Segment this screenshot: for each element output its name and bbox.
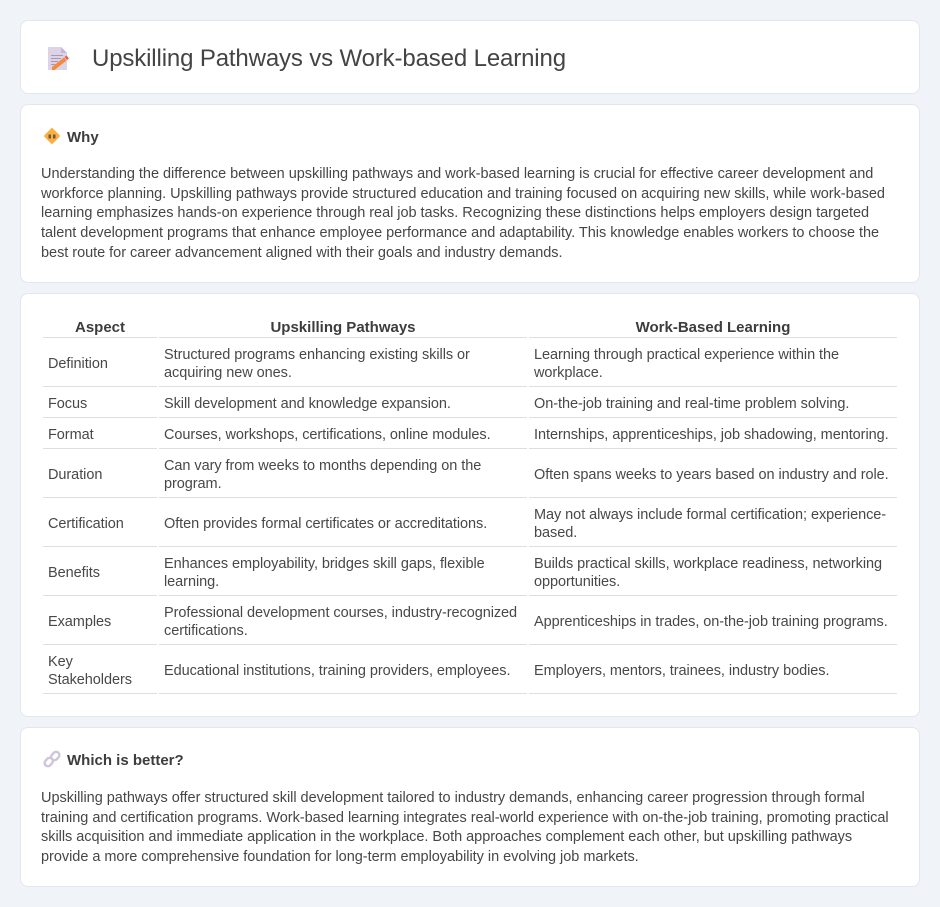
cell: examples upskilling: certifications. [164, 623, 248, 639]
cell: format upskilling: Courses, workshops, certifications, online modules. [164, 427, 491, 443]
cell: format work-based: Internships, apprenticeships, job shadowing, mentoring. [534, 427, 889, 443]
table header: upskilling pathways: Upskilling Pathways [270, 319, 416, 336]
row: focus: Focus [48, 396, 87, 412]
row: format: Format [48, 427, 94, 443]
cell: duration work-based: Often spans weeks to years based on industry and role. [534, 467, 889, 483]
row: examples: Examples [48, 614, 111, 630]
row: key stakeholders: Stakeholders [48, 672, 132, 688]
row: definition: Definition [48, 356, 108, 372]
cell: certification work-based: based. [534, 525, 577, 541]
icon: chain link [44, 750, 60, 768]
cell: definition upskilling: acquiring new ones. [164, 365, 292, 381]
cell: focus upskilling: Skill development and knowledge expansion. [164, 396, 451, 412]
table header: aspect: Aspect [75, 319, 125, 336]
cell: certification upskilling: Often provides formal certificates or accreditations. [164, 516, 487, 532]
cell: examples upskilling [164, 605, 517, 639]
cell: benefits upskilling [164, 556, 485, 590]
cell: focus work-based: On-the-job training and real-time problem solving. [534, 396, 849, 412]
cell: definition work-based: Learning through practical experience within the [534, 347, 839, 363]
text block: why paragraph: Understanding the difference between upskilling pathways and work-based learning is crucial for effective career development and [41, 166, 873, 182]
cell: certification work-based [534, 507, 886, 541]
cell: duration upskilling [164, 458, 481, 492]
text block: which is better paragraph: training and certification programs. Work-based learning integrates real-world experience with on-the-job training, promoting practical [41, 810, 889, 826]
text block: which is better paragraph [41, 790, 889, 865]
text block: why paragraph: learning emphasizes hands-on experience through real job tasks. Recognizing these distinctions helps employers design targeted [41, 205, 869, 221]
text block: which is better paragraph: provide a more comprehensive foundation for long-term employability in evolving job markets. [41, 849, 639, 865]
cell: definition upskilling: Structured programs enhancing existing skills or [164, 347, 470, 363]
icon: document with pencil [48, 47, 69, 70]
heading: which is better: Which is better? [67, 752, 184, 769]
title: Upskilling Pathways vs Work-based Learning [92, 45, 566, 72]
cell: duration upskilling: Can vary from weeks to months depending on the [164, 458, 481, 474]
icon: diamond sign [44, 128, 60, 144]
cell: benefits work-based: Builds practical skills, workplace readiness, networking [534, 556, 882, 572]
row: certification: Certification [48, 516, 124, 532]
text block: why paragraph: best route for career advancement aligned with their goals and industry demands. [41, 245, 563, 261]
panel: comparison table [20, 293, 920, 717]
panel: title header [20, 20, 920, 94]
cell: definition work-based: workplace. [534, 365, 603, 381]
text block: why paragraph [41, 166, 885, 261]
panel: why [20, 104, 920, 283]
cell: benefits upskilling: Enhances employability, bridges skill gaps, flexible [164, 556, 485, 572]
panel: which is better [20, 727, 920, 887]
table header: work-based learning: Work-Based Learning [636, 319, 790, 336]
text block: why paragraph: talent development programs that enhance employee performance and adaptability. This knowledge enables workers to choose the [41, 225, 879, 241]
row: benefits: Benefits [48, 565, 100, 581]
text block: why paragraph: workforce planning. Upskilling pathways provide structured education and training focused on acquiring new skills, while work-based [41, 186, 885, 202]
cell: definition work-based [534, 347, 839, 381]
row: key stakeholders: Key [48, 654, 73, 670]
heading: why: Why [67, 129, 99, 146]
cell: benefits work-based: opportunities. [534, 574, 620, 590]
row: duration: Duration [48, 467, 102, 483]
row: key stakeholders [48, 654, 132, 688]
cell: benefits upskilling: learning. [164, 574, 219, 590]
cell: benefits work-based [534, 556, 882, 590]
cell: stakeholders upskilling: Educational institutions, training providers, employees. [164, 663, 510, 679]
text block: which is better paragraph: skills acquisition and immediate application in the workplace. Both approaches complement each other, but upskilling pathways [41, 829, 852, 845]
cell: examples upskilling: Professional development courses, industry-recognized [164, 605, 517, 621]
cell: definition upskilling [164, 347, 470, 381]
cell: duration upskilling: program. [164, 476, 222, 492]
cell: certification work-based: May not always include formal certification; experience- [534, 507, 886, 523]
cell: stakeholders work-based: Employers, mentors, trainees, industry bodies. [534, 663, 829, 679]
text block: which is better paragraph: Upskilling pathways offer structured skill development tailored to industry demands, enhancing career progression through formal [41, 790, 865, 806]
cell: examples work-based: Apprenticeships in trades, on-the-job training programs. [534, 614, 888, 630]
